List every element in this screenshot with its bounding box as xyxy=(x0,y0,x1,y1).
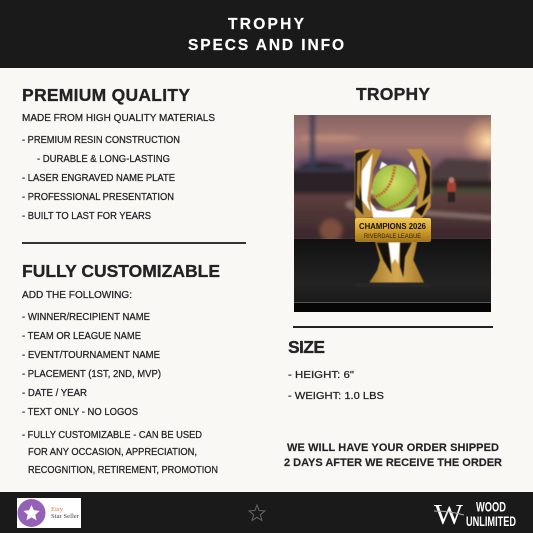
name plate xyxy=(355,218,431,242)
panel: fully customizable xyxy=(22,261,220,476)
photo background: softball field at sunset xyxy=(294,115,491,239)
heading: trophy: TROPHY xyxy=(356,84,430,104)
wood unlimited logo: W xyxy=(434,499,464,531)
list: customization options: - TEAM OR LEAGUE NAME xyxy=(22,331,141,342)
subheading: add the following: ADD THE FOLLOWING: xyxy=(22,290,132,301)
background player xyxy=(447,177,456,202)
trophy frame xyxy=(355,149,382,219)
text block: occasions xyxy=(22,430,218,476)
footer band xyxy=(0,492,533,533)
panel: premium quality xyxy=(22,85,215,222)
shipping notice xyxy=(284,442,502,469)
list: quality features: - BUILT TO LAST FOR YEARS xyxy=(22,211,151,222)
icon: purple badge with star xyxy=(18,499,46,527)
list: customization options: - PLACEMENT (1ST, 2ND, MVP) xyxy=(22,369,161,380)
etsy star seller badge: Etsy xyxy=(51,507,63,513)
list: dimensions xyxy=(288,370,384,402)
list: customization options: - EVENT/TOURNAMENT NAME xyxy=(22,350,160,361)
header band xyxy=(0,0,533,68)
panel: size xyxy=(288,337,384,402)
text block: occasions: FOR ANY OCCASION, APPRECIATION, xyxy=(28,447,197,458)
list: quality features xyxy=(22,135,180,222)
text block: occasions: RECOGNITION, RETIREMENT, PROMOTION xyxy=(28,465,218,476)
list: customization options xyxy=(22,312,161,418)
heading: premium quality: PREMIUM QUALITY xyxy=(22,85,190,105)
list: customization options: - DATE / YEAR xyxy=(22,388,87,399)
heading: size: SIZE xyxy=(288,337,325,357)
subheading: materials: MADE FROM HIGH QUALITY MATERIALS xyxy=(22,113,215,124)
wood unlimited logo xyxy=(434,498,516,531)
shipping notice: WE WILL HAVE YOUR ORDER SHIPPED xyxy=(287,442,499,454)
trophy xyxy=(355,149,431,287)
wood unlimited logo: WOOD xyxy=(476,498,506,514)
list: quality features: - PROFESSIONAL PRESENTATION xyxy=(22,192,174,203)
trophy stem and base xyxy=(369,241,424,283)
etsy star seller badge xyxy=(17,498,81,528)
etsy star seller badge: Star Seller xyxy=(51,514,79,520)
header title: TROPHY xyxy=(228,16,305,33)
trophy photo xyxy=(294,115,491,312)
table surface xyxy=(294,239,491,302)
heading: fully customizable: FULLY CUSTOMIZABLE xyxy=(22,261,220,281)
icon: outlined star xyxy=(249,505,265,520)
list: quality features: - DURABLE & LONG-LASTING xyxy=(37,154,170,165)
name plate: RIVERDALE LEAGUE xyxy=(364,233,422,240)
list: dimensions: - HEIGHT: 6" xyxy=(288,370,355,381)
list: quality features: - PREMIUM RESIN CONSTRUCTION xyxy=(22,135,180,146)
list: quality features: - LASER ENGRAVED NAME PLATE xyxy=(22,173,175,184)
list: customization options: - TEXT ONLY - NO LOGOS xyxy=(22,407,138,418)
softball xyxy=(372,165,418,210)
header title: SPECS AND INFO xyxy=(188,37,344,54)
text block: occasions: - FULLY CUSTOMIZABLE - CAN BE USED xyxy=(22,430,202,441)
header title xyxy=(188,16,344,54)
shipping notice: 2 DAYS AFTER WE RECEIVE THE ORDER xyxy=(284,457,502,469)
list: customization options: - WINNER/RECIPIENT NAME xyxy=(22,312,150,323)
list: dimensions: - WEIGHT: 1.0 LBS xyxy=(288,391,384,402)
name plate: CHAMPIONS 2026 xyxy=(359,222,427,231)
